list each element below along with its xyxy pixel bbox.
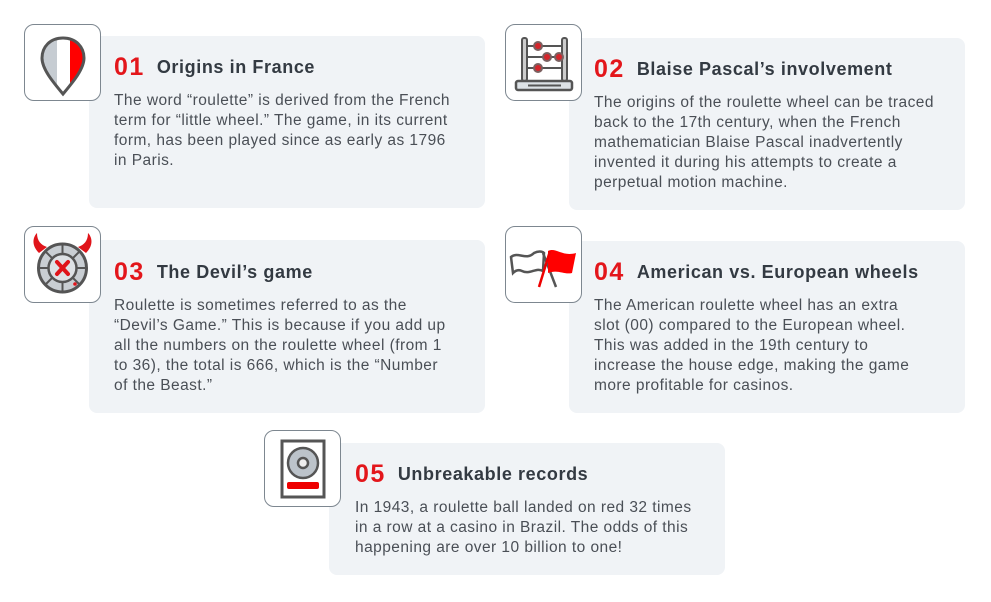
text block: perpetual motion machine. — [594, 174, 788, 191]
icon: record device — [264, 430, 341, 507]
text block — [594, 297, 909, 394]
text block: form, has been played since as early as 1796 — [114, 132, 446, 149]
text block — [594, 94, 934, 191]
icon: devil roulette wheel — [24, 226, 101, 303]
heading: 02 Blaise Pascal’s involvement — [594, 55, 892, 83]
text block — [355, 499, 692, 556]
text block: invented it during his attempts to create a — [594, 154, 897, 171]
text block: term for “little wheel.” The game, in its current — [114, 112, 448, 129]
text block: mathematician Blaise Pascal inadvertently — [594, 134, 903, 151]
text block: increase the house edge, making the game — [594, 357, 909, 374]
text block: Roulette is sometimes referred to as the — [114, 297, 407, 314]
heading: 04 American vs. European wheels — [594, 258, 919, 286]
text block — [114, 92, 450, 169]
icon: abacus — [505, 24, 582, 101]
text block: This was added in the 19th century to — [594, 337, 868, 354]
icon: flags — [505, 226, 582, 303]
panel: American vs European — [505, 226, 965, 413]
text block: happening are over 10 billion to one! — [355, 539, 622, 556]
text block: slot (00) compared to the European wheel. — [594, 317, 905, 334]
heading: 05 Unbreakable records — [355, 460, 588, 488]
text block: back to the 17th century, when the French — [594, 114, 901, 131]
text block: more profitable for casinos. — [594, 377, 794, 394]
text block: of the Beast.” — [114, 377, 212, 394]
text block: The origins of the roulette wheel can be traced — [594, 94, 934, 111]
text block — [114, 297, 446, 394]
text block: “Devil’s Game.” This is because if you add up — [114, 317, 446, 334]
text block: to 36), the total is 666, which is the “Number — [114, 357, 438, 374]
heading: 01 Origins in France — [114, 53, 315, 81]
text block: all the numbers on the roulette wheel (from 1 — [114, 337, 442, 354]
heading: 03 The Devil’s game — [114, 258, 313, 286]
text block: in Paris. — [114, 152, 174, 169]
panel: origins in France — [24, 24, 485, 208]
panel: Unbreakable records — [264, 430, 725, 575]
text block: In 1943, a roulette ball landed on red 32 times — [355, 499, 692, 516]
panel: Devil's game — [24, 226, 485, 413]
panel: Blaise Pascal — [505, 24, 965, 210]
text block: The American roulette wheel has an extra — [594, 297, 898, 314]
icon: map pin — [24, 24, 101, 101]
text block: in a row at a casino in Brazil. The odds of this — [355, 519, 688, 536]
text block: The word “roulette” is derived from the French — [114, 92, 450, 109]
